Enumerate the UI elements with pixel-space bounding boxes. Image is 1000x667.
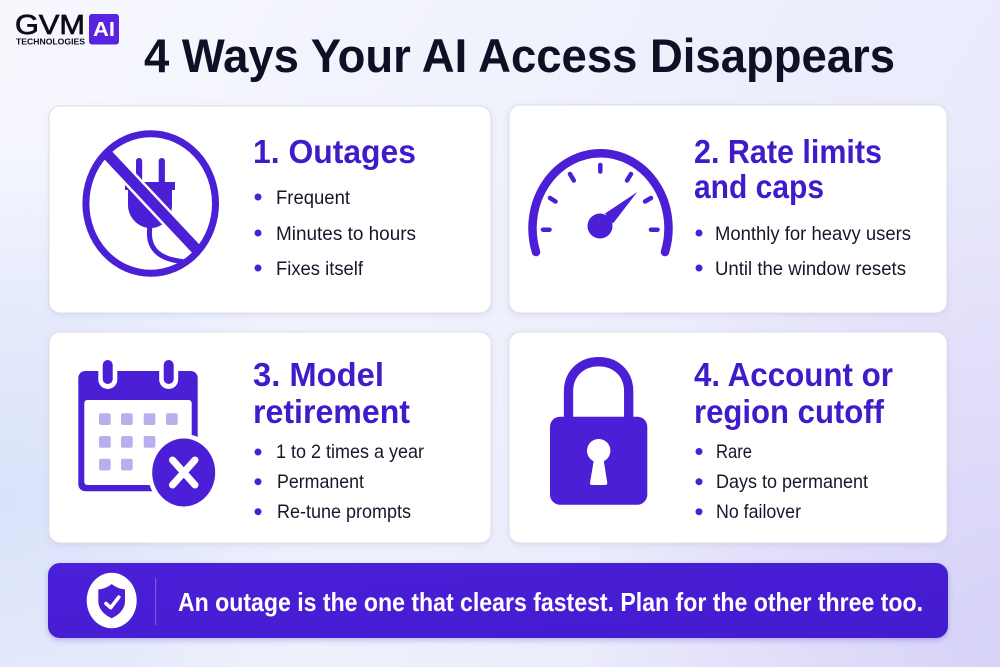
logo: AI — [93, 19, 115, 41]
bullet list: outages: Minutes to hours — [276, 223, 416, 245]
heading: rate limits: and caps — [694, 168, 824, 205]
bullet list: account or region cutoff: Days to permanent — [716, 471, 869, 493]
bullet list: account or region cutoff: No failover — [716, 501, 801, 523]
bullet list: account or region cutoff: Rare — [716, 441, 752, 463]
panel: outages — [49, 106, 491, 313]
bullet list: rate limits: Until the window resets — [715, 258, 906, 280]
bullet list: outages — [254, 187, 416, 280]
heading: account or region cutoff — [694, 356, 893, 430]
icon: shield check — [87, 573, 137, 628]
callout banner — [48, 563, 948, 638]
bullet list: rate limits: Monthly for heavy users — [715, 223, 911, 245]
bullet list: model retirement — [254, 441, 424, 523]
heading: outages: 1. Outages — [253, 133, 416, 170]
heading: model retirement: 3. Model — [253, 356, 384, 393]
bullet list: outages: Fixes itself — [276, 258, 364, 280]
logo — [15, 9, 119, 46]
panel: rate limits — [509, 105, 947, 313]
heading: account or region cutoff: region cutoff — [694, 393, 885, 430]
panel: model retirement — [49, 332, 491, 543]
icon: calendar with x badge — [78, 355, 220, 511]
logo: GVM — [15, 9, 85, 40]
bullet list: model retirement: 1 to 2 times a year — [276, 441, 424, 463]
heading: rate limits — [694, 133, 882, 205]
heading: account or region cutoff: 4. Account or — [694, 356, 893, 393]
heading: rate limits: 2. Rate limits — [694, 133, 882, 170]
icon: padlock — [550, 362, 647, 505]
bullet list: model retirement: Permanent — [277, 471, 365, 493]
heading: model retirement — [253, 356, 410, 430]
icon: crossed-out plug — [86, 134, 216, 273]
panel: account or region cutoff — [509, 332, 947, 543]
heading: model retirement: retirement — [253, 393, 410, 430]
icon: gauge — [533, 153, 668, 252]
bullet list: model retirement: Re-tune prompts — [277, 501, 411, 523]
title: 4 Ways Your AI Access Disappears — [144, 29, 895, 82]
callout text: An outage is the one that clears fastest. Plan for the other three too. — [178, 587, 923, 617]
bullet list: outages: Frequent — [276, 187, 351, 209]
bullet list: rate limits — [696, 223, 911, 280]
bullet list: account or region cutoff — [696, 441, 869, 523]
logo: TECHNOLOGIES — [16, 38, 85, 46]
